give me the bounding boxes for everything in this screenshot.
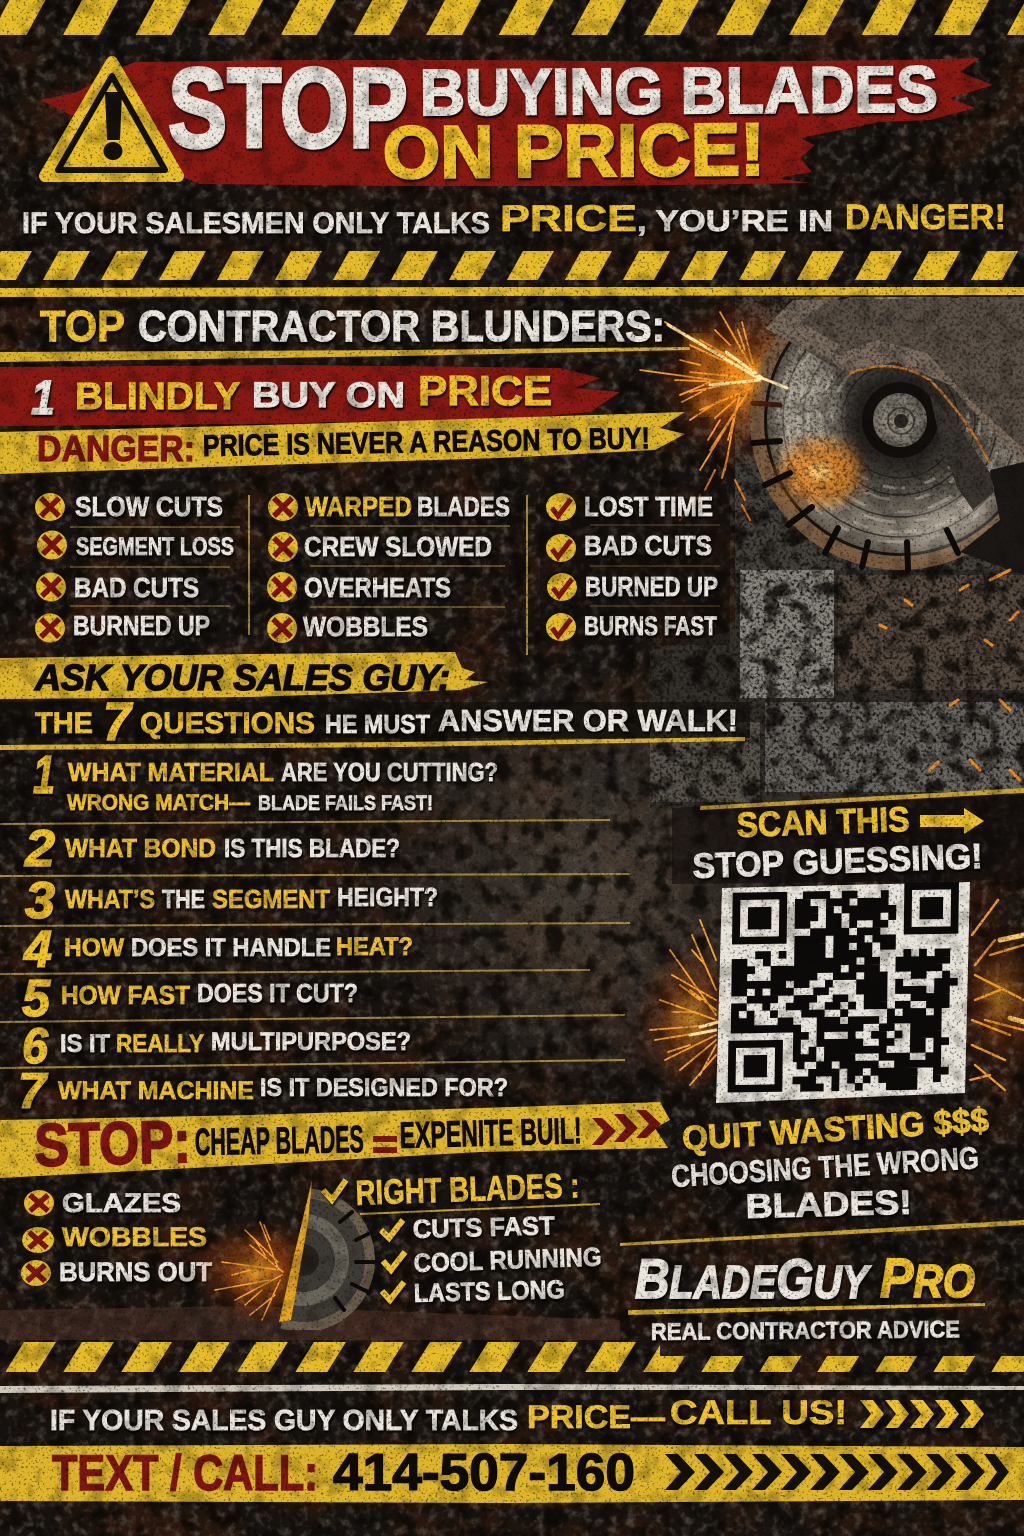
heading: RIGHT BLADES : xyxy=(355,1166,580,1213)
panel: failure list column 1 xyxy=(35,491,234,642)
panel: scan callout xyxy=(672,788,1024,886)
question 5: DOES IT CUT? xyxy=(197,978,358,1008)
headline: STOP xyxy=(168,45,408,171)
questions heading xyxy=(0,692,750,752)
question 6 xyxy=(22,1018,411,1074)
warning triangle icon xyxy=(45,62,178,176)
questions heading: QUESTIONS xyxy=(140,707,315,740)
wobbles: WOBBLES xyxy=(62,1222,207,1252)
scan this: SCAN THIS xyxy=(736,800,910,845)
warped blades: BLADES xyxy=(417,491,510,522)
warped blades: WARPED xyxy=(305,491,412,522)
burned up: BURNED UP xyxy=(73,610,210,641)
question 3: SEGMENT xyxy=(212,884,330,914)
top hazard stripes xyxy=(0,0,1024,35)
questions heading: THE xyxy=(35,707,93,740)
QR code xyxy=(716,882,970,1103)
cuts fast: CUTS FAST xyxy=(412,1210,555,1244)
call to action line: PRICE— xyxy=(527,1399,665,1435)
panel: quit wasting xyxy=(670,1101,990,1226)
dividers xyxy=(249,495,527,655)
burns fast xyxy=(546,611,717,641)
wobbles xyxy=(267,611,428,643)
question 2 xyxy=(24,820,400,878)
call to action line: CALL US! xyxy=(670,1394,847,1432)
heading: CONTRACTOR BLUNDERS: xyxy=(138,302,665,351)
panel: top contractor blunders xyxy=(0,302,690,474)
burned up xyxy=(35,610,210,642)
lasts long: LASTS LONG xyxy=(413,1274,565,1308)
sparks around QR code xyxy=(632,900,1024,1100)
question 5: 5 xyxy=(22,970,51,1028)
call to action line xyxy=(50,1394,984,1437)
question 4: HEAT? xyxy=(336,933,413,961)
bottom hazard stripes xyxy=(0,1342,1024,1393)
red brush stroke xyxy=(40,58,993,186)
panel: top contractor blunders: PRICE IS NEVER A REASON TO BUY! xyxy=(203,422,650,463)
question 1 xyxy=(33,745,498,815)
wobbles: WOBBLES xyxy=(303,611,428,642)
question 2: WHAT BOND xyxy=(65,833,216,863)
sparks burst xyxy=(640,312,787,520)
subheading: PRICE xyxy=(500,198,637,239)
question 6: IS IT xyxy=(60,1030,110,1058)
panel: right blades xyxy=(323,1166,602,1308)
phone banner xyxy=(0,1444,1024,1503)
blade disc xyxy=(750,270,1024,570)
cool running: COOL RUNNING xyxy=(413,1241,602,1278)
question 3: WHAT’S xyxy=(65,884,155,914)
subheading: DANGER! xyxy=(845,198,1006,237)
panel: seven questions xyxy=(0,745,630,1119)
question 1: WHAT MATERIAL xyxy=(68,757,274,787)
crew slowed: CREW SLOWED xyxy=(304,531,492,562)
heading xyxy=(323,1166,580,1213)
burns out: BURNS OUT xyxy=(59,1257,212,1287)
question 5: HOW FAST xyxy=(61,980,190,1010)
brand logo: REAL CONTRACTOR ADVICE xyxy=(651,1316,960,1346)
questions heading: 7 xyxy=(103,692,134,752)
question 7: IS IT DESIGNED FOR? xyxy=(260,1074,508,1102)
burns fast: BURNS FAST xyxy=(584,611,717,641)
bad cuts xyxy=(36,572,199,603)
slow cuts: SLOW CUTS xyxy=(75,491,223,522)
panel: failure list column 3 xyxy=(540,490,730,645)
ground strip xyxy=(0,1306,620,1340)
subheading: , YOU’RE IN xyxy=(637,205,833,238)
segment loss: SEGMENT LOSS xyxy=(76,533,234,561)
headline: ON PRICE! xyxy=(382,108,765,194)
panel: top contractor blunders: BUY ON xyxy=(252,376,405,415)
red banner blunder one xyxy=(0,365,620,426)
question 6: 6 xyxy=(22,1018,49,1074)
spark glow xyxy=(650,290,840,470)
question 5 xyxy=(22,970,358,1028)
arrows xyxy=(860,1400,984,1428)
panel: top contractor blunders: 1 xyxy=(31,372,55,425)
question 4: 4 xyxy=(23,921,52,979)
question 7 xyxy=(18,1063,508,1119)
panel: quit wasting: BLADES! xyxy=(745,1184,912,1226)
question 2: 2 xyxy=(24,820,55,878)
questions heading: ANSWER OR WALK! xyxy=(438,703,738,738)
call to action line: IF YOUR SALES GUY ONLY TALKS xyxy=(50,1405,518,1437)
ask your sales guy banner: ASK YOUR SALES GUY: xyxy=(34,657,450,698)
burned up xyxy=(547,571,718,602)
subheading: IF YOUR SALESMEN ONLY TALKS xyxy=(22,207,490,240)
bad cuts xyxy=(546,530,712,562)
question 7: WHAT MACHINE xyxy=(58,1077,254,1105)
question 1: 1 xyxy=(33,745,55,805)
lost time: LOST TIME xyxy=(584,491,713,522)
title block xyxy=(40,45,993,194)
panel: top contractor blunders: DANGER: xyxy=(37,428,195,469)
headline: BUYING BLADES xyxy=(420,52,938,129)
question 1: BLADE FAILS FAST! xyxy=(258,792,433,815)
bad cuts: BAD CUTS xyxy=(74,572,199,603)
overheats: OVERHEATS xyxy=(304,572,451,603)
stop guessing: STOP GUESSING! xyxy=(692,837,983,886)
question 3 xyxy=(25,872,438,930)
stop banner: STOP: xyxy=(34,1108,191,1179)
question 3: HEIGHT? xyxy=(337,882,438,912)
chevrons xyxy=(665,1454,1009,1490)
glazes: GLAZES xyxy=(62,1188,181,1218)
panel: top contractor blunders: BLINDLY xyxy=(75,376,240,418)
question 4: HOW xyxy=(64,934,124,962)
danger banner xyxy=(0,412,685,474)
question 3: 3 xyxy=(25,872,55,930)
question 6: REALLY xyxy=(116,1030,204,1058)
question 4: DOES IT HANDLE xyxy=(131,934,331,962)
heading: TOP xyxy=(40,302,125,351)
chevrons xyxy=(592,1110,661,1145)
question 4 xyxy=(23,921,413,979)
stop banner xyxy=(0,1102,670,1179)
subheading xyxy=(22,198,1006,240)
segment loss xyxy=(37,530,234,561)
brand logo: BLADEGUY xyxy=(635,1247,872,1310)
question 3: THE xyxy=(162,884,205,914)
small blade with sparks xyxy=(190,1180,375,1332)
glazes xyxy=(24,1188,181,1218)
question 1: WRONG MATCH— xyxy=(67,790,250,815)
brand logo: PRO xyxy=(880,1246,975,1309)
hazard stripes two xyxy=(0,251,1024,297)
brand logo xyxy=(628,1246,985,1346)
stop banner: EXPENITE BUIL! xyxy=(399,1110,582,1156)
question 7: 7 xyxy=(18,1063,48,1119)
question 6: MULTIPURPOSE? xyxy=(211,1028,411,1056)
warped blades xyxy=(268,491,510,522)
stop banner: CHEAP BLADES xyxy=(194,1119,364,1164)
finder patterns xyxy=(728,882,959,1093)
headline xyxy=(168,45,938,194)
panel: quit wasting: QUIT WASTING $$$ xyxy=(681,1101,990,1158)
saw blade illustration xyxy=(640,270,1024,575)
arrow xyxy=(920,808,984,834)
question 2: IS THIS BLADE? xyxy=(224,833,400,863)
lost time xyxy=(546,491,713,522)
burned up: BURNED UP xyxy=(585,571,718,602)
panel: failure list column 2 xyxy=(267,491,510,643)
bad cuts: BAD CUTS xyxy=(584,530,712,561)
embers scattered around wall xyxy=(880,570,1020,780)
questions heading: HE MUST xyxy=(325,709,430,739)
phone banner: 414-507-160 xyxy=(333,1444,635,1502)
concrete wall and stone backdrop xyxy=(340,297,1024,1120)
panel: cheap blade failures xyxy=(21,1188,212,1287)
blade guard xyxy=(765,297,1024,575)
question 1: ARE YOU CUTTING? xyxy=(281,757,498,787)
panel: top contractor blunders: PRICE xyxy=(418,367,552,414)
phone banner: TEXT / CALL: xyxy=(52,1445,318,1501)
